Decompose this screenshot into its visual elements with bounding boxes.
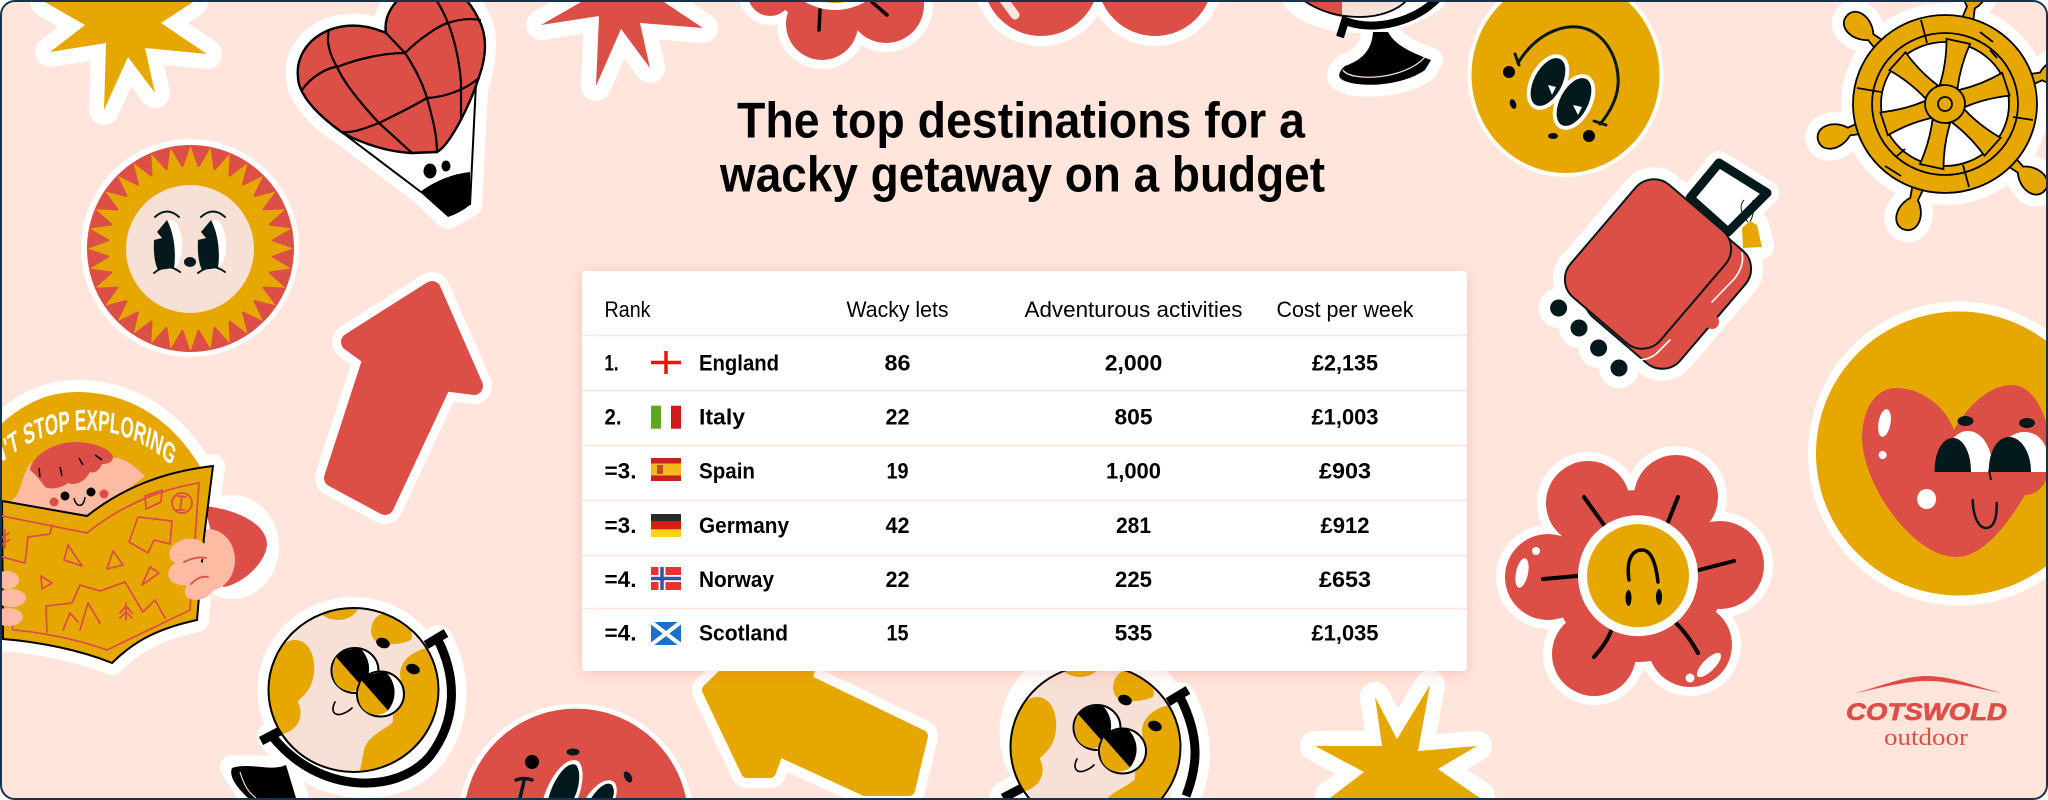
- row: Norway: Norway: [699, 567, 775, 592]
- icon: sun face: [81, 139, 299, 357]
- row: England: 1.: [604, 351, 618, 376]
- row: Scotland: £1,035: [1312, 621, 1378, 646]
- icon: globe character bottom centre: [990, 671, 1210, 798]
- row: Italy: £1,003: [1312, 405, 1378, 430]
- row: Italy: 2.: [604, 405, 622, 430]
- table header: Wacky lets: [846, 297, 948, 322]
- row: Scotland: Scotland: [699, 621, 788, 646]
- icon: yellow smiley top right: [1468, 0, 1664, 177]
- row: England: England: [699, 351, 779, 376]
- icon: red heart top, cropped: [983, 0, 1213, 36]
- row: Norway: =4.: [604, 567, 636, 592]
- icon: yellow arrow bottom: [708, 640, 922, 790]
- icon: globe top, cropped: [1295, 0, 1438, 85]
- row: Germany: Germany: [699, 513, 790, 538]
- row: England: 2,000: [1105, 351, 1162, 376]
- icon: red suitcase: [1550, 163, 1767, 379]
- row: Norway: 22: [886, 567, 910, 592]
- row: Germany: =3.: [604, 513, 636, 538]
- icon: yellow star bottom: [1315, 685, 1480, 798]
- row: Spain: £903: [1319, 459, 1371, 484]
- row: Scotland: =4.: [604, 621, 636, 646]
- icon: heart hot air balloon: [298, 0, 485, 217]
- row: Germany: 42: [886, 513, 910, 538]
- row: Norway: 225: [1115, 567, 1152, 592]
- icon: ship wheel: [1815, 0, 2048, 233]
- row: Italy: [604, 405, 1378, 430]
- icon: globe character bottom left: [231, 592, 451, 798]
- row: Germany: 281: [1116, 513, 1151, 538]
- icon: red smiley bottom: [460, 704, 692, 800]
- table header: [604, 297, 1414, 322]
- title: [719, 92, 1325, 202]
- row: England: 86: [884, 351, 910, 376]
- row: England: £2,135: [1312, 351, 1378, 376]
- title: wacky getaway on a budget: [719, 146, 1325, 202]
- panel: ranking table: [582, 271, 1467, 671]
- icon: red star top: [541, 2, 703, 86]
- row: Spain: [604, 458, 1371, 484]
- row: Norway: £653: [1319, 567, 1371, 592]
- row: Germany: [604, 513, 1370, 538]
- row: Spain: =3.: [604, 459, 636, 484]
- row: Spain: 1,000: [1106, 459, 1161, 484]
- logo: Cotswold Outdoor: outdoor: [1884, 725, 1968, 751]
- icon: heart face on yellow circle: [1808, 302, 2048, 606]
- icon: flower top, cropped: [748, 0, 924, 60]
- row: Norway: [604, 567, 1371, 592]
- row: England: [604, 351, 1378, 376]
- row: Germany: £912: [1320, 513, 1370, 538]
- table header: Rank: [604, 297, 651, 322]
- table header: Cost per week: [1276, 297, 1414, 322]
- row: Spain: Spain: [699, 459, 755, 484]
- row: Scotland: 15: [886, 621, 908, 646]
- icon: smiling flower: [1505, 455, 1764, 696]
- title: The top destinations for a: [737, 92, 1306, 148]
- row: Italy: Italy: [699, 405, 746, 430]
- icon: red arrow: [333, 290, 474, 506]
- row: Scotland: 535: [1115, 621, 1152, 646]
- row: Scotland: [604, 621, 1378, 646]
- icon: person reading map sticker: [2, 380, 279, 675]
- logo: Cotswold Outdoor: COTSWOLD: [1846, 699, 2007, 726]
- icon: yellow star top left: [45, 2, 207, 110]
- row: Spain: 19: [886, 459, 908, 484]
- row: Italy: 22: [886, 405, 910, 430]
- row: Italy: 805: [1114, 405, 1152, 430]
- logo: Cotswold Outdoor: [1846, 676, 2007, 751]
- table header: Adventurous activities: [1024, 297, 1242, 322]
